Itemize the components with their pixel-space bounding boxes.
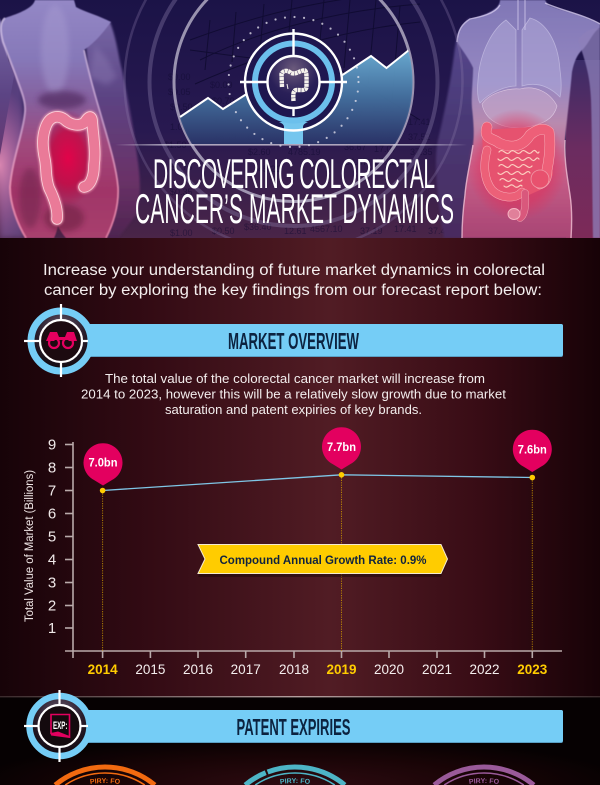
y axis numbers: 1 [48, 620, 56, 637]
intestine glow [468, 112, 562, 214]
right body figure [436, 0, 600, 238]
x axis years: 2016 [183, 662, 213, 677]
x axis years: 2023 [517, 662, 548, 677]
title: CANCER’S MARKET DYNAMICS [135, 186, 454, 233]
large intestine [485, 127, 550, 220]
y axis numbers: 9 [48, 436, 56, 454]
financial table backdrop: 1.00 [170, 122, 188, 132]
financial table backdrop: 36.97 [340, 110, 363, 120]
x axis years: 2018 [279, 662, 309, 677]
far-side arm [436, 18, 476, 238]
financial table backdrop: 12.61 [284, 226, 307, 236]
callout: compound annual growth rate ribbon: Compound Annual Growth Rate: 0.9% [220, 555, 426, 567]
x axis years: 2022 [469, 662, 500, 677]
financial table backdrop: 36.67 [344, 142, 367, 152]
intro text [43, 262, 545, 299]
financial table backdrop: $1.50 [164, 140, 187, 150]
header rule [115, 144, 467, 146]
financial table backdrop: 17.25 [374, 157, 397, 167]
colon [43, 117, 95, 219]
area chart [170, 50, 420, 144]
financial table backdrop: $2.50 [246, 132, 269, 142]
y axis label: Total Value of Market (Billions) [24, 470, 36, 622]
y axis numbers: 4 [48, 552, 56, 568]
financial table backdrop: 17.41 [408, 117, 431, 127]
callout: 2023 value: 7.6bn [518, 444, 547, 456]
target icon with colon [240, 29, 347, 144]
left body figure [0, 0, 140, 243]
financial table backdrop: 45.21 [258, 164, 281, 174]
financial table backdrop [164, 72, 451, 238]
overview text: saturation and patent expiries of key brands. [165, 402, 422, 417]
x axis years: 2019 [326, 662, 357, 677]
stamp: orange expiry [54, 764, 156, 785]
x axis years: 2020 [374, 662, 404, 677]
financial table backdrop: $0.50 [170, 102, 193, 112]
heading banner: patent expiries [70, 710, 563, 743]
intro text: cancer by exploring the key findings from our forecast report below: [44, 282, 542, 299]
financial table backdrop: $2.60 [248, 147, 271, 157]
back highlights [41, 5, 69, 95]
perspective grid [190, 0, 420, 120]
financial table backdrop: 17.10 [374, 130, 397, 140]
panel: header illustration [0, 0, 600, 251]
heading banner: market overview: MARKET OVERVIEW [228, 328, 359, 354]
financial table backdrop: 37.35 [410, 147, 433, 157]
dark organs shadow [38, 91, 86, 109]
y axis numbers: 5 [48, 528, 56, 546]
heading banner: market overview [70, 324, 563, 357]
heading banner: patent expiries: PATENT EXPIRIES [236, 714, 350, 740]
callout: compound annual growth rate ribbon [198, 544, 448, 577]
financial table backdrop: $0.50 [212, 226, 235, 236]
stamp: purple expiry [432, 764, 536, 785]
financial table backdrop: 37.46 [428, 226, 451, 236]
dotted drop lines [103, 475, 532, 651]
far arm [0, 18, 14, 155]
body outlines [1, 18, 26, 238]
y axis numbers: 3 [48, 574, 56, 592]
trachea highlight [518, 0, 525, 30]
financial table backdrop: $5.19 [214, 132, 237, 142]
pink backdrop glow [0, 60, 24, 238]
dotted arc [228, 17, 358, 147]
icon: expiry label target [24, 690, 90, 762]
callout: 2019 value [322, 427, 361, 470]
x axis years: 2021 [422, 662, 452, 677]
intro text: Increase your understanding of future market dynamics in colorectal [43, 262, 545, 279]
section divider [0, 696, 600, 697]
inflamed centre [48, 112, 89, 201]
arm gap [566, 60, 600, 238]
financial table backdrop: $2.45 [214, 114, 237, 124]
callout: 2014 value: 7.0bn [88, 458, 118, 470]
y axis numbers [48, 436, 56, 637]
body outlines [462, 145, 473, 238]
financial table backdrop: $0.00 [168, 72, 191, 82]
financial table backdrop: $36.40 [244, 222, 272, 232]
near arm [581, 28, 600, 238]
upper abdomen organs [482, 88, 557, 128]
panel: patent expiries background [0, 697, 600, 785]
data line [103, 475, 532, 490]
financial table backdrop: 4567.10 [310, 224, 343, 234]
x axis years: 2014 [88, 662, 118, 677]
overview text: The total value of the colorectal cancer market will increase from [105, 371, 485, 386]
title: DISCOVERING COLORECTAL [153, 151, 435, 198]
financial table backdrop: 36.47 [345, 157, 368, 167]
near arm [85, 22, 140, 238]
financial table backdrop: $0.09 [210, 80, 233, 90]
overview text: 2014 to 2023, however this will be a relatively slow growth due to market [81, 386, 506, 402]
stamp: teal expiry [244, 764, 346, 785]
callout: 2014 value [84, 443, 122, 486]
y axis numbers: 2 [48, 598, 56, 614]
financial table backdrop: $0.35 [170, 187, 193, 197]
torso [1, 0, 118, 238]
overview text [81, 371, 506, 417]
financial table backdrop: $1.75 [170, 162, 193, 172]
financial table backdrop: $0.05 [168, 87, 191, 97]
financial table backdrop: 4785.19 [288, 147, 321, 157]
financial table backdrop: 36.57 [342, 127, 365, 137]
financial table backdrop: 17.07 [374, 144, 397, 154]
callout: 2023 value [513, 430, 552, 472]
torso [457, 0, 600, 238]
panel: market overview background [0, 238, 600, 697]
financial table backdrop: $0.70 [212, 96, 235, 106]
callout: 2019 value: 7.7bn [327, 442, 356, 454]
axes [65, 442, 562, 658]
small intestine squiggles [498, 150, 539, 187]
financial table backdrop: 16.75 [372, 104, 395, 114]
x axis years: 2015 [135, 662, 165, 677]
y axis numbers: 8 [48, 460, 56, 476]
y axis numbers: 6 [48, 506, 56, 522]
icon: binoculars target [24, 304, 91, 377]
financial table backdrop: 37.19 [360, 226, 383, 236]
title [136, 158, 454, 224]
line chart [24, 427, 562, 677]
financial table backdrop: 17.41 [394, 224, 417, 234]
financial table backdrop: 37.52 [408, 132, 431, 142]
lungs [478, 18, 561, 103]
icon: expiry label target: EXP: [53, 720, 68, 732]
small intestine mass [482, 126, 553, 198]
y axis numbers: 7 [48, 482, 56, 500]
x axis years [88, 662, 548, 677]
big concentric rings [124, 0, 462, 251]
x axis years: 2017 [231, 662, 261, 677]
financial table backdrop: 17.02 [372, 117, 395, 127]
financial table backdrop: $1.00 [170, 228, 193, 238]
